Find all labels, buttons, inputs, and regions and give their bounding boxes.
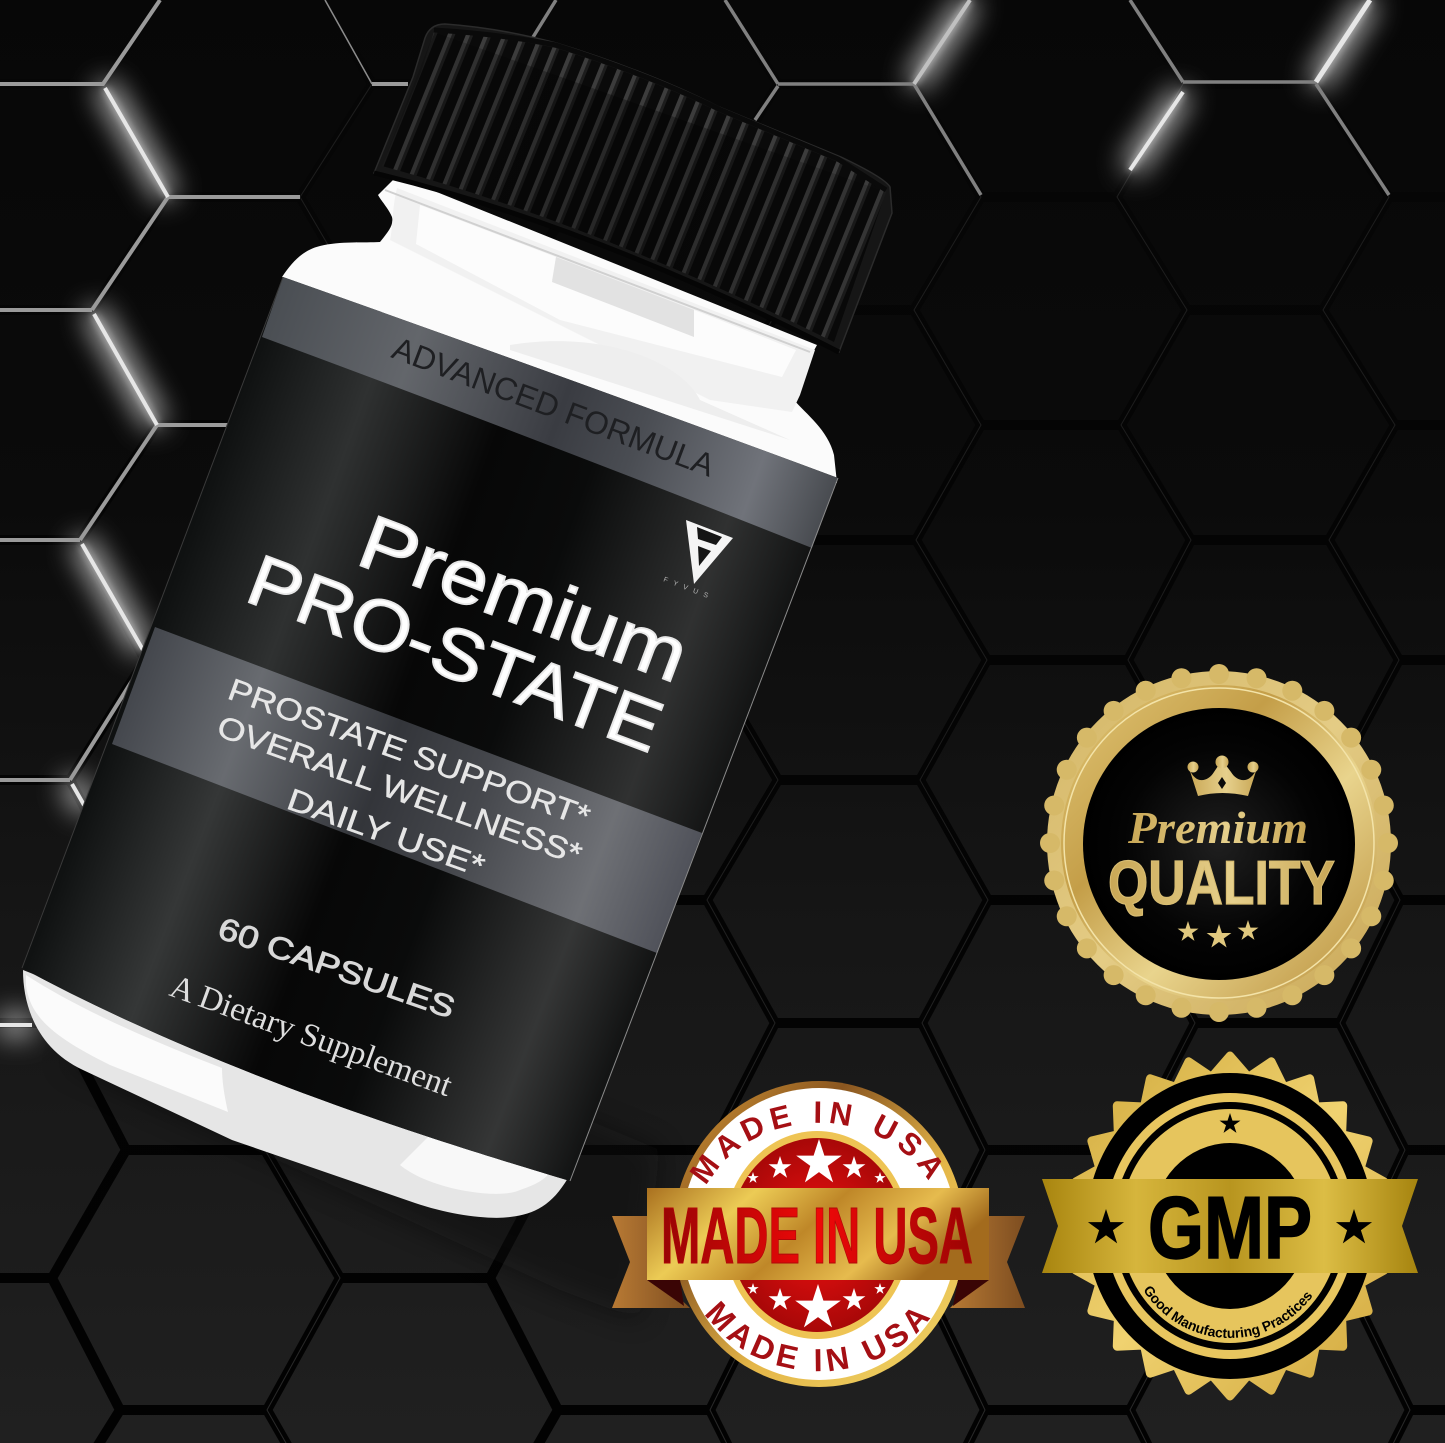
outer gold ring [673, 1081, 965, 1387]
icon: top star [1220, 1113, 1240, 1133]
arc text: bottom: MADE IN USA [705, 1300, 930, 1372]
glowing hexagon edges [0, 0, 1389, 1025]
text: good manufacturing practices: Good Manufacturing Practices [1144, 1286, 1312, 1338]
red disc [730, 1138, 904, 1332]
gold starburst seal [1070, 1056, 1390, 1396]
bottle shadow [60, 1000, 660, 1320]
label band: top [262, 277, 838, 548]
badge: made in usa [612, 1081, 1025, 1387]
benefit lines [213, 672, 595, 884]
inner gold ring [724, 1131, 910, 1339]
icon: white stars [747, 1139, 886, 1327]
icon: crown [1188, 756, 1258, 796]
arc text: top: MADE IN USA [690, 1102, 942, 1184]
logo: fyvus [662, 520, 733, 602]
benefit lines: PROSTATE SUPPORT* [224, 672, 595, 834]
dietary supplement text: A Dietary Supplement [165, 969, 457, 1104]
bottle cap [374, 24, 892, 352]
badge: gmp [1042, 1052, 1418, 1400]
icon: ribbon stars [1088, 1209, 1372, 1243]
benefit lines: DAILY USE* [283, 782, 489, 884]
supplement bottle [22, 24, 892, 1218]
product name: premium: Premium [348, 499, 699, 699]
white ring [681, 1088, 957, 1380]
benefit lines: OVERALL WELLNESS* [213, 709, 587, 872]
logo: fyvus: FYVUS [662, 576, 715, 602]
ribbon folds [647, 1280, 989, 1306]
text: made in usa: MADE IN USA [661, 1191, 973, 1280]
text: quality: QUALITY [1108, 849, 1335, 918]
text: gmp: GMP [1148, 1178, 1312, 1277]
bottle shoulder and neck [282, 176, 837, 483]
ribbon tails [612, 1216, 1025, 1308]
badge: premium quality [1047, 671, 1391, 1015]
text: premium: Premium [1127, 802, 1308, 853]
capsule count: 60 CAPSULES [214, 911, 459, 1025]
text: advanced formula: ADVANCED FORMULA [388, 330, 720, 484]
main ribbon [647, 1188, 989, 1280]
bottle label [22, 277, 838, 1181]
bottle base [23, 970, 568, 1218]
product name: pro-state: PRO-STATE [237, 540, 673, 768]
ribbon [1042, 1179, 1418, 1273]
lower label shading [22, 744, 657, 1181]
icon: three stars [1178, 920, 1258, 948]
label band: middle [112, 627, 702, 953]
